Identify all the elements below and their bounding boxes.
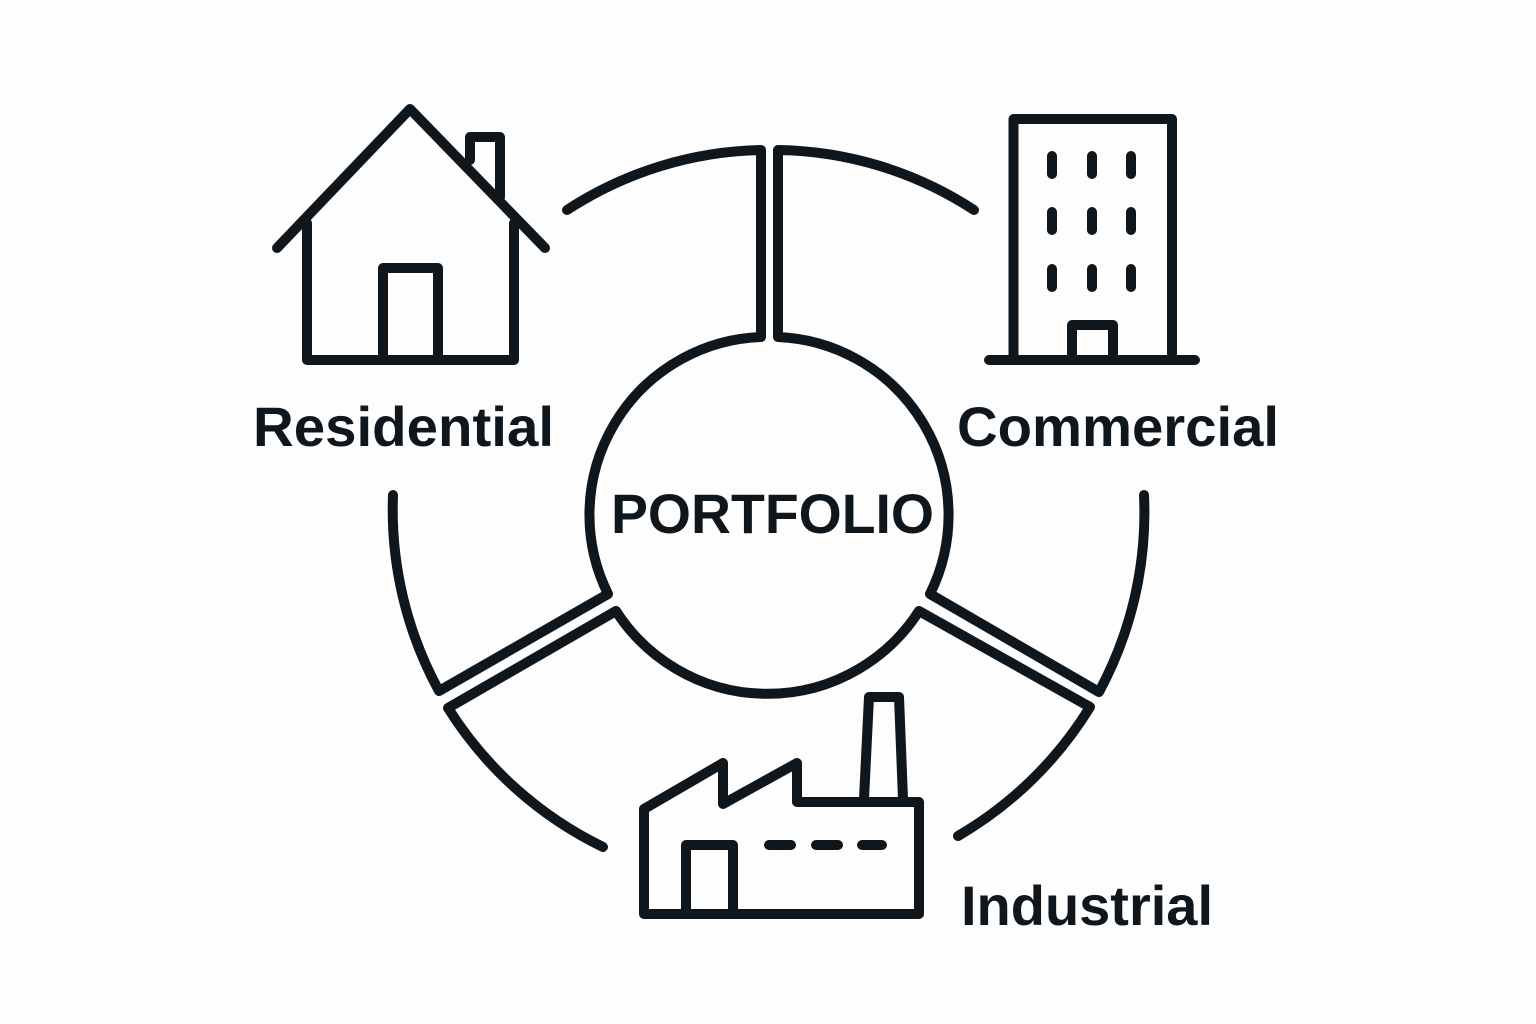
ring diagram: segments around the centre (393, 150, 1144, 847)
label: Commercial: Commercial (957, 395, 1279, 458)
label: Industrial: Industrial (961, 874, 1213, 937)
segment: industrial (448, 611, 1090, 847)
centre label: PORTFOLIO: PORTFOLIO (611, 482, 934, 545)
segment: commercial (778, 150, 1144, 692)
label: Residential: Residential (253, 395, 554, 458)
icon: factory (644, 697, 919, 914)
segment: residential (393, 150, 761, 691)
icon: office building (989, 119, 1195, 360)
icon: house (277, 109, 545, 360)
